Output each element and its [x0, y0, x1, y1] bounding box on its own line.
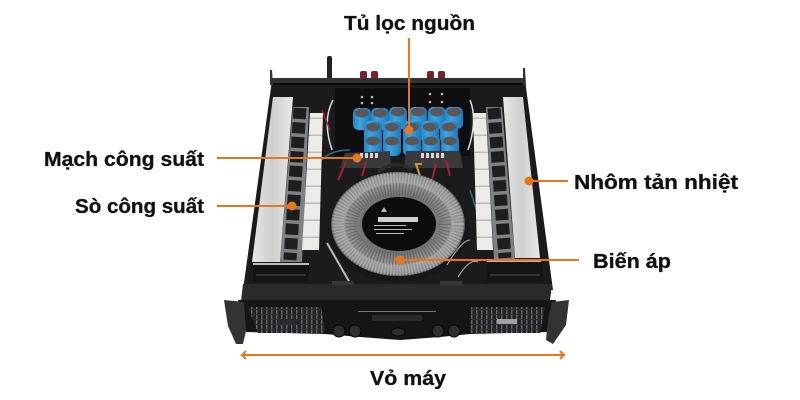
- right white wires: [327, 240, 478, 283]
- label: Tủ lọc nguồn: Tủ lọc nguồn: [344, 13, 475, 35]
- control knobs: [333, 325, 460, 337]
- filter board: [335, 88, 470, 156]
- right white blocks: [473, 113, 493, 250]
- toroidal transformer: Biến áp: [328, 172, 468, 282]
- leader: Biến áp: [396, 256, 579, 264]
- left white blocks: [302, 113, 323, 250]
- right transistor row: [486, 107, 515, 260]
- width arrow: Vỏ máy: [242, 351, 564, 359]
- capacitor bank: Tủ lọc nguồn: [353, 107, 463, 156]
- power circuit boards: Mạch công suất: [338, 151, 463, 180]
- rear rail: [270, 68, 526, 85]
- leader: Mạch công suất: [217, 154, 362, 162]
- left cooling fan: [253, 263, 309, 282]
- right heatsink: [503, 97, 540, 258]
- leader lines and dots: [217, 38, 579, 264]
- wires left: [322, 100, 478, 215]
- label: Vỏ máy: Vỏ máy: [370, 368, 447, 390]
- front panel face: [238, 300, 556, 340]
- right grille: [470, 307, 545, 333]
- leader: Nhôm tản nhiệt: [524, 176, 568, 186]
- label: Sò công suất: Sò công suất: [75, 196, 204, 218]
- leader: Tủ lọc nguồn: [404, 38, 414, 134]
- label: Nhôm tản nhiệt: Nhôm tản nhiệt: [574, 172, 738, 194]
- label: Mạch công suất: Mạch công suất: [44, 149, 204, 171]
- leader: Sò công suất: [217, 202, 296, 210]
- amplifier chassis photo: [224, 56, 569, 344]
- grille badges: [277, 319, 298, 324]
- label: Biến áp: Biến áp: [593, 251, 671, 273]
- left rack ear: [224, 300, 246, 344]
- chassis interior: [243, 80, 553, 290]
- display window: [372, 315, 422, 321]
- power cable: [327, 56, 332, 80]
- rear terminals: [360, 71, 445, 79]
- left grille: [248, 307, 325, 333]
- left transistor row: Sò công suất: [280, 107, 309, 262]
- right rack ear: [546, 300, 569, 344]
- left heatsink: Nhôm tản nhiệt: [252, 97, 293, 262]
- front panel top lip: [241, 284, 552, 301]
- right cooling fan: [487, 260, 543, 282]
